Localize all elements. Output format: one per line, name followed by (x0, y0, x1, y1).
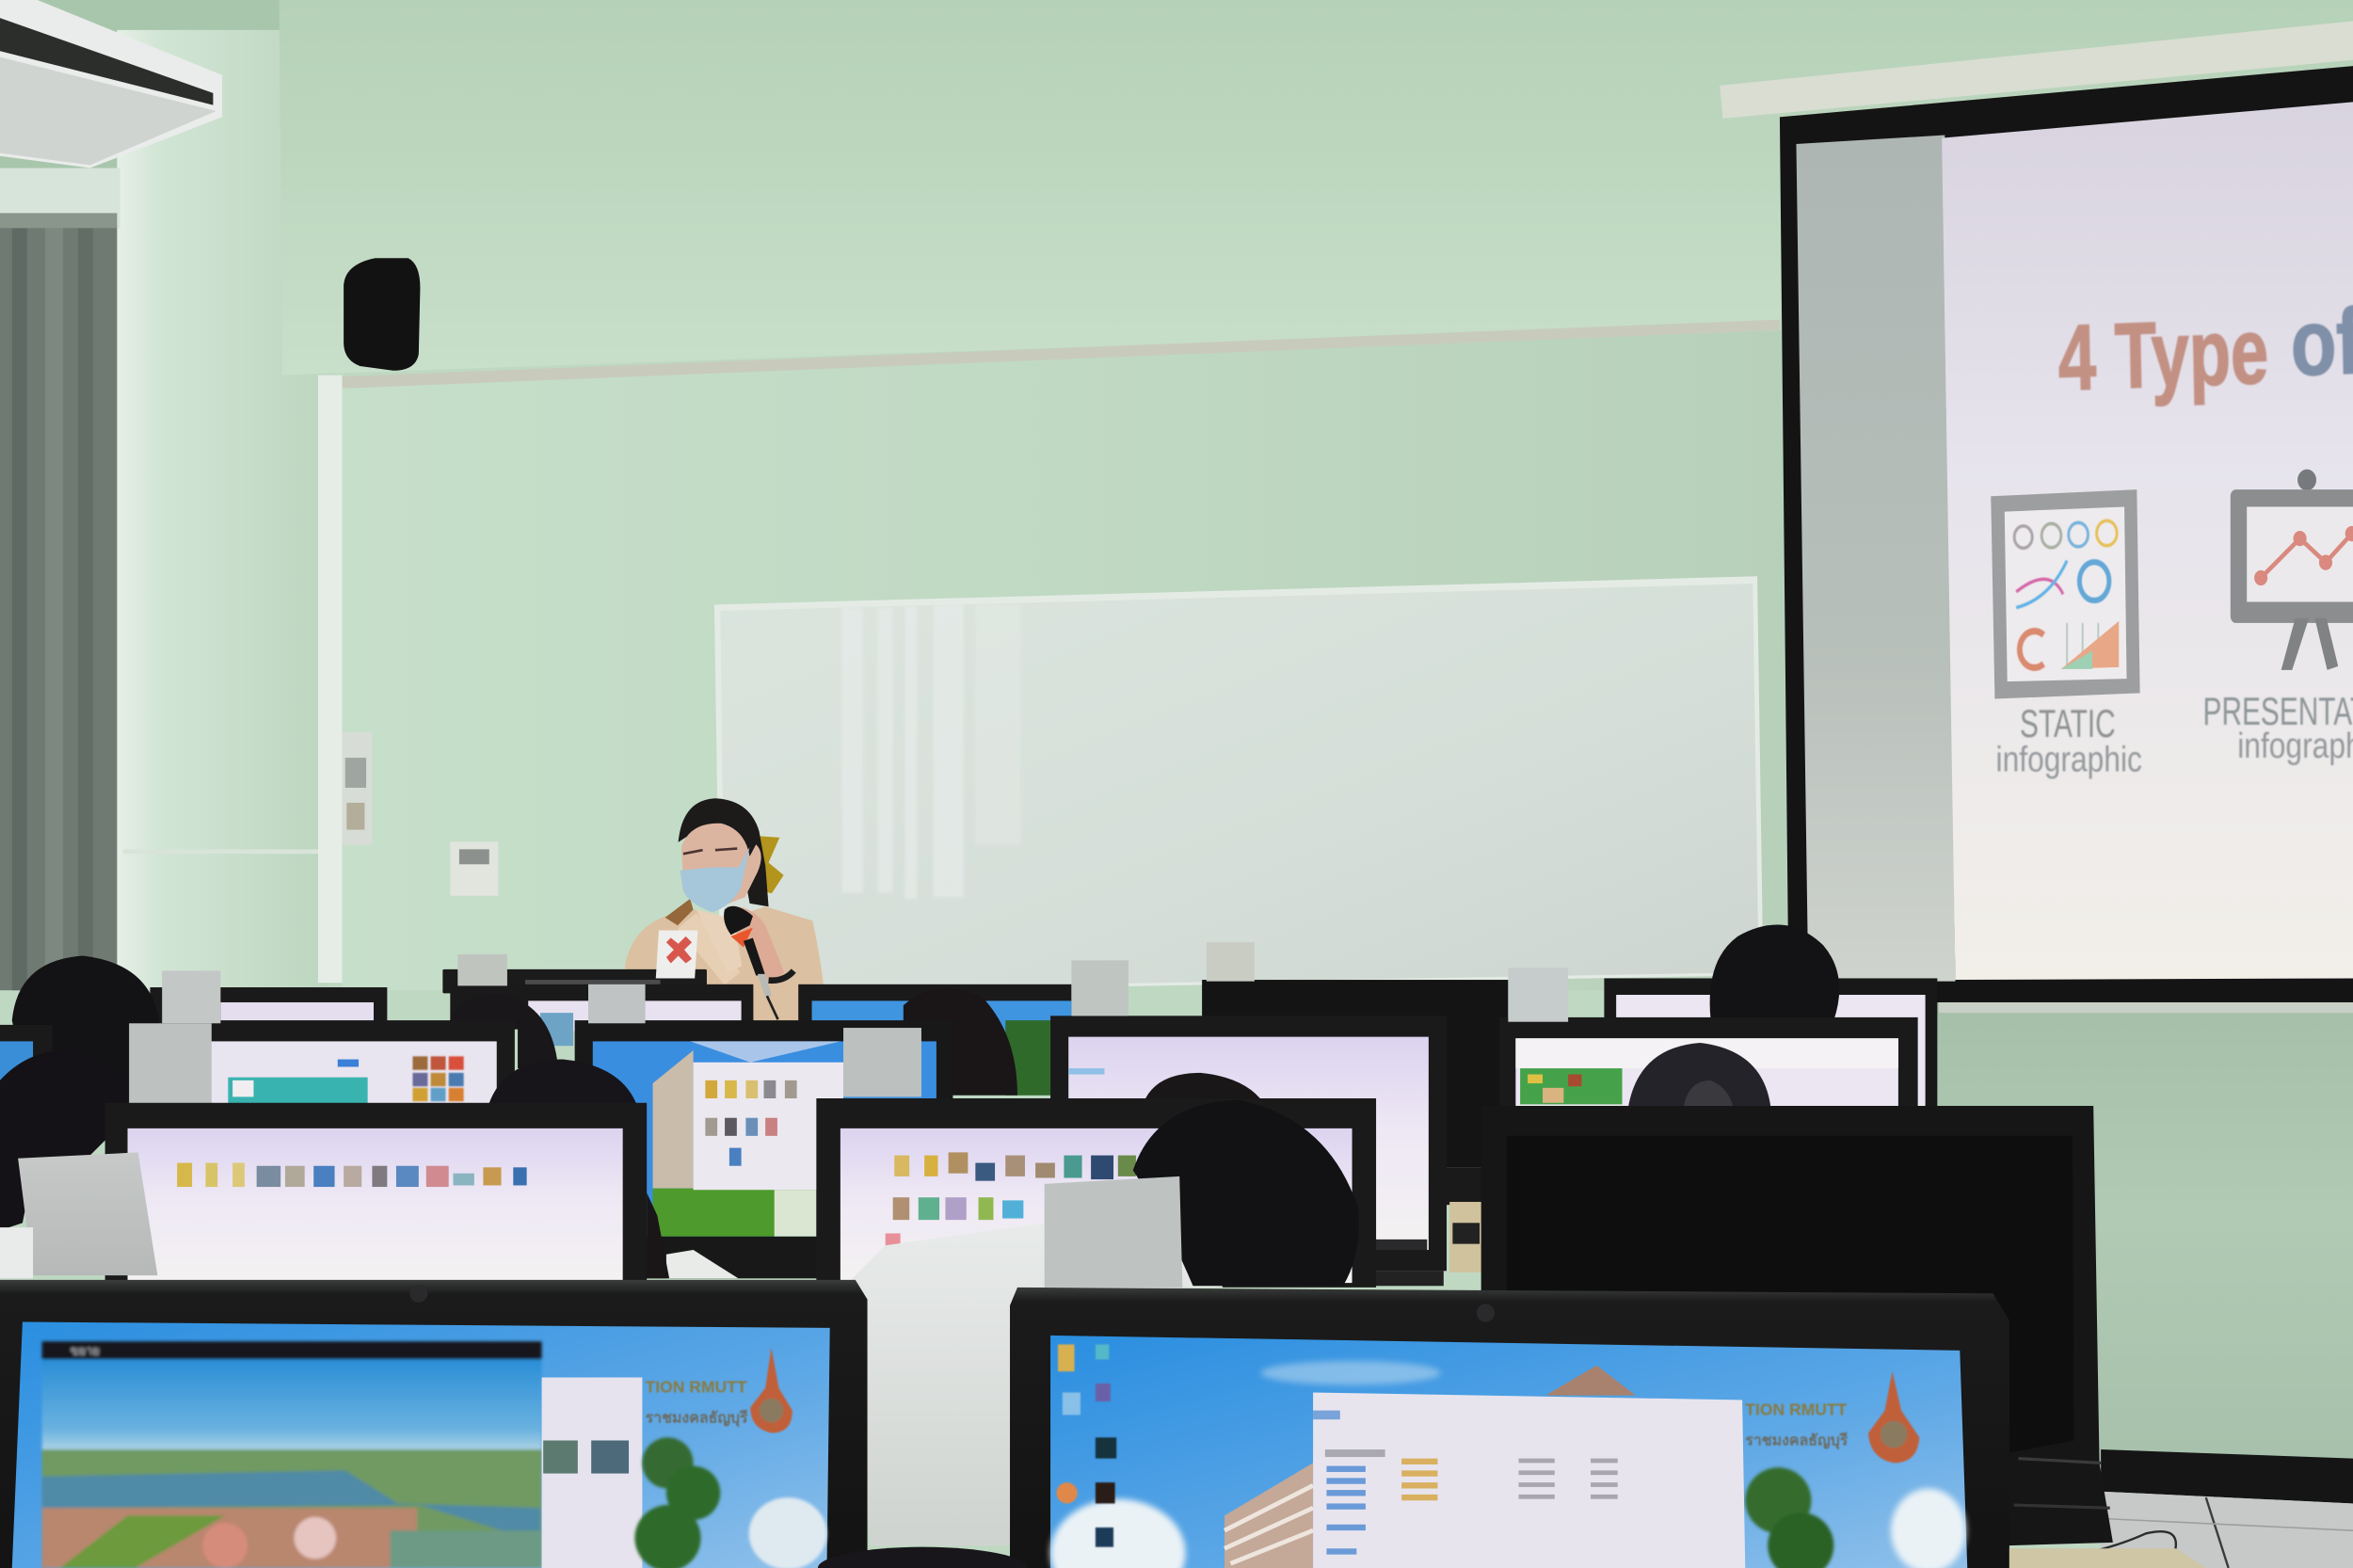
presenter face (681, 824, 761, 910)
wallpaper tree (1745, 1467, 1833, 1568)
monitor: back centre left (450, 984, 753, 1046)
icon: static infographic poster (1991, 489, 2140, 699)
paper cards (129, 942, 1568, 1104)
student shirt: far left (0, 1227, 33, 1278)
slide labels: infographic (1996, 740, 2142, 779)
front right monitor (818, 1288, 2009, 1568)
slide labels: STATIC (2020, 701, 2116, 745)
browser window photo (42, 1341, 542, 1568)
card (457, 954, 507, 985)
student white shirt (843, 1223, 1223, 1545)
bezel (1010, 1288, 2009, 1568)
wallpaper clouds (1050, 1361, 1966, 1568)
monitor: thumbnails (816, 1098, 1376, 1288)
slide labels (1996, 689, 2353, 779)
window text: ขยาย (71, 1344, 100, 1358)
card (162, 970, 220, 1023)
desktop icons (1056, 1344, 1116, 1547)
monitor: back centre blue (798, 984, 1071, 1096)
monitor: back centre dark (1202, 980, 1508, 1205)
wall switches (343, 732, 498, 896)
third row monitors (0, 1098, 2113, 1545)
card (1045, 1176, 1182, 1288)
window curtain (0, 168, 120, 990)
monitor: wallpaper (575, 1020, 952, 1278)
wallpaper banner text and emblem: TION RMUTT (646, 1377, 747, 1396)
screen wallpaper (12, 1322, 830, 1568)
screen wallpaper (1050, 1336, 1967, 1568)
front left monitor (0, 1280, 868, 1568)
monitor: file window (1050, 1016, 1447, 1286)
back row monitors (12, 925, 1937, 1205)
red x name card (656, 930, 697, 978)
presenter (625, 798, 824, 1022)
card (1508, 968, 1568, 1022)
wallpaper tree and cloud (634, 1437, 827, 1568)
desk with keyboard (1449, 1202, 1482, 1272)
monitor: game window (1499, 1017, 1918, 1108)
presenter face mask (680, 847, 750, 912)
second row monitors (0, 1016, 1918, 1286)
card (18, 1152, 157, 1275)
microphone and hand (724, 906, 793, 1019)
presenter jacket (625, 906, 824, 1022)
slide title (2057, 289, 2353, 410)
file explorer window (1313, 1392, 1745, 1568)
wallpaper banner text and emblem (1745, 1371, 1919, 1463)
icon: presentation board (2231, 470, 2353, 670)
monitor: icon row (105, 1103, 647, 1283)
student head: centre (904, 988, 1017, 1096)
wallpaper building (1225, 1366, 1636, 1568)
card (1207, 942, 1255, 982)
student head: back right (1710, 925, 1839, 1020)
wallpaper banner text and emblem: ราชมงคลธัญบุรี (646, 1408, 748, 1427)
student head: left (12, 956, 159, 1103)
student head: low (1144, 1073, 1263, 1103)
monitor: presenter desk (442, 969, 707, 993)
wallpaper banner text and emblem: ราชมงคลธัญบุรี (1745, 1431, 1849, 1449)
long hair by monitor (647, 1192, 669, 1278)
whiteboard (714, 576, 1763, 993)
presenter hair and bow (665, 798, 784, 925)
monitor: edge left (0, 1025, 53, 1115)
card (1071, 960, 1128, 1016)
student head: bottom (818, 1547, 1028, 1568)
monitor: back right (1604, 978, 1937, 1108)
monitor: dark off screen (1481, 1106, 2113, 1545)
wall speaker (344, 258, 420, 371)
air conditioner (0, 0, 222, 168)
webcam (409, 1285, 427, 1303)
bezel (0, 1280, 868, 1568)
student head: ponytail (1628, 1043, 1770, 1108)
desk corner (2009, 1548, 2206, 1568)
monitor: far left (150, 987, 387, 1026)
wallpaper banner text and emblem: TION RMUTT (1745, 1400, 1848, 1418)
monitor: game store (210, 1020, 515, 1111)
slide title: 4 Type (2057, 300, 2269, 410)
file window (542, 1378, 642, 1568)
student head: centre (1133, 1100, 1359, 1286)
card (129, 1023, 212, 1104)
wall rail and conduit (318, 320, 1780, 983)
student head: far left with long hair (0, 1050, 132, 1230)
student head: behind tall monitor (447, 994, 558, 1068)
student head: centre left (488, 1060, 638, 1108)
skirting and floor (2010, 1449, 2353, 1568)
card (843, 1028, 921, 1096)
card (588, 984, 646, 1023)
wallpaper banner text and emblem (646, 1348, 792, 1433)
webcam (1477, 1304, 1495, 1322)
projector screen (1720, 21, 2353, 1013)
student shirt: centre left (666, 1250, 738, 1278)
